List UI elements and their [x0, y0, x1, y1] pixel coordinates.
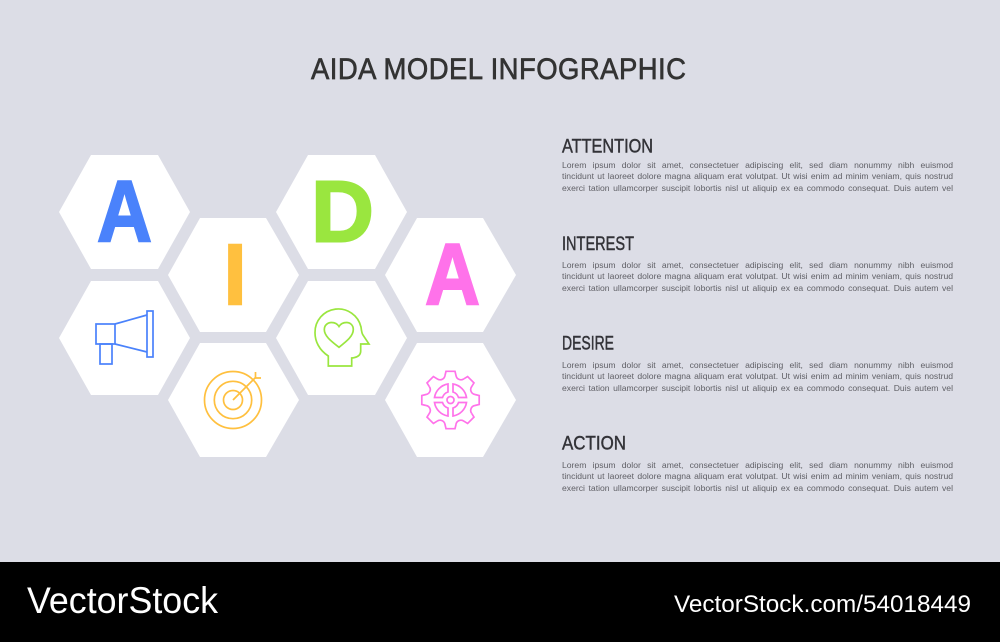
hexagon: letter A attention	[59, 155, 190, 269]
footer logo: VectorStock	[27, 580, 218, 621]
body text: desire: exerci tation ullamcorper suscipit lobortis nisl ut aliquip ex ea commodo consequat. Duis autem vel	[562, 383, 953, 393]
hexagon: head with heart icon	[276, 281, 407, 395]
heading: attention: ATTENTION	[562, 136, 653, 158]
body text: interest	[562, 260, 953, 293]
text block: action	[562, 434, 953, 493]
body text: action: exerci tation ullamcorper suscipit lobortis nisl ut aliquip ex ea commodo consequat. Duis autem vel	[562, 483, 953, 493]
body text: desire: Lorem ipsum dolor sit amet, consectetuer adipiscing elit, sed diam nonummy nibh euismod	[562, 360, 953, 370]
body text: interest: exerci tation ullamcorper suscipit lobortis nisl ut aliquip ex ea commodo consequat. Duis autem vel	[562, 283, 953, 293]
body text: attention: exerci tation ullamcorper suscipit lobortis nisl ut aliquip ex ea commodo consequat. Duis autem vel	[562, 183, 953, 193]
footer image id: VectorStock.com/54018449	[674, 591, 971, 618]
body text: attention	[562, 160, 953, 193]
heading: interest: INTEREST	[562, 234, 634, 255]
body text: action: Lorem ipsum dolor sit amet, consectetuer adipiscing elit, sed diam nonummy nibh euismod	[562, 460, 953, 470]
hexagon: target icon	[168, 343, 299, 457]
hexagon: letter D desire	[276, 155, 407, 269]
hexagon: letter A attention: A	[97, 164, 152, 260]
hexagon: letter I interest	[168, 218, 299, 332]
body text: interest: Lorem ipsum dolor sit amet, consectetuer adipiscing elit, sed diam nonummy nibh euismod	[562, 260, 953, 270]
body text: interest: tincidunt ut laoreet dolore magna aliquam erat volutpat. Ut wisi enim ad minim veniam, quis nostrud	[562, 271, 953, 281]
body text: attention: tincidunt ut laoreet dolore magna aliquam erat volutpat. Ut wisi enim ad minim veniam, quis nostrud	[562, 171, 953, 181]
body text: desire: tincidunt ut laoreet dolore magna aliquam erat volutpat. Ut wisi enim ad minim veniam, quis nostrud	[562, 371, 953, 381]
heading: desire: DESIRE	[562, 334, 614, 354]
text block: interest	[562, 234, 953, 293]
body text: action	[562, 460, 953, 493]
body text: desire	[562, 360, 953, 393]
footer bar: VectorStock watermark	[0, 562, 1000, 642]
title: AIDA MODEL INFOGRAPHIC	[311, 53, 686, 86]
hexagon: letter I interest: I	[223, 226, 247, 323]
hexagon: megaphone icon	[59, 281, 190, 395]
hexagon: letter D desire: D	[311, 164, 374, 260]
body text: attention: Lorem ipsum dolor sit amet, consectetuer adipiscing elit, sed diam nonummy nibh euismod	[562, 160, 953, 170]
hexagon: gear icon	[385, 343, 516, 457]
hexagon: letter A action	[385, 218, 516, 332]
heading: action: ACTION	[562, 434, 626, 454]
text block: desire	[562, 334, 953, 393]
hexagon: letter A action: A	[425, 226, 480, 324]
body text: action: tincidunt ut laoreet dolore magna aliquam erat volutpat. Ut wisi enim ad minim veniam, quis nostrud	[562, 471, 953, 481]
text block: attention	[562, 136, 953, 193]
